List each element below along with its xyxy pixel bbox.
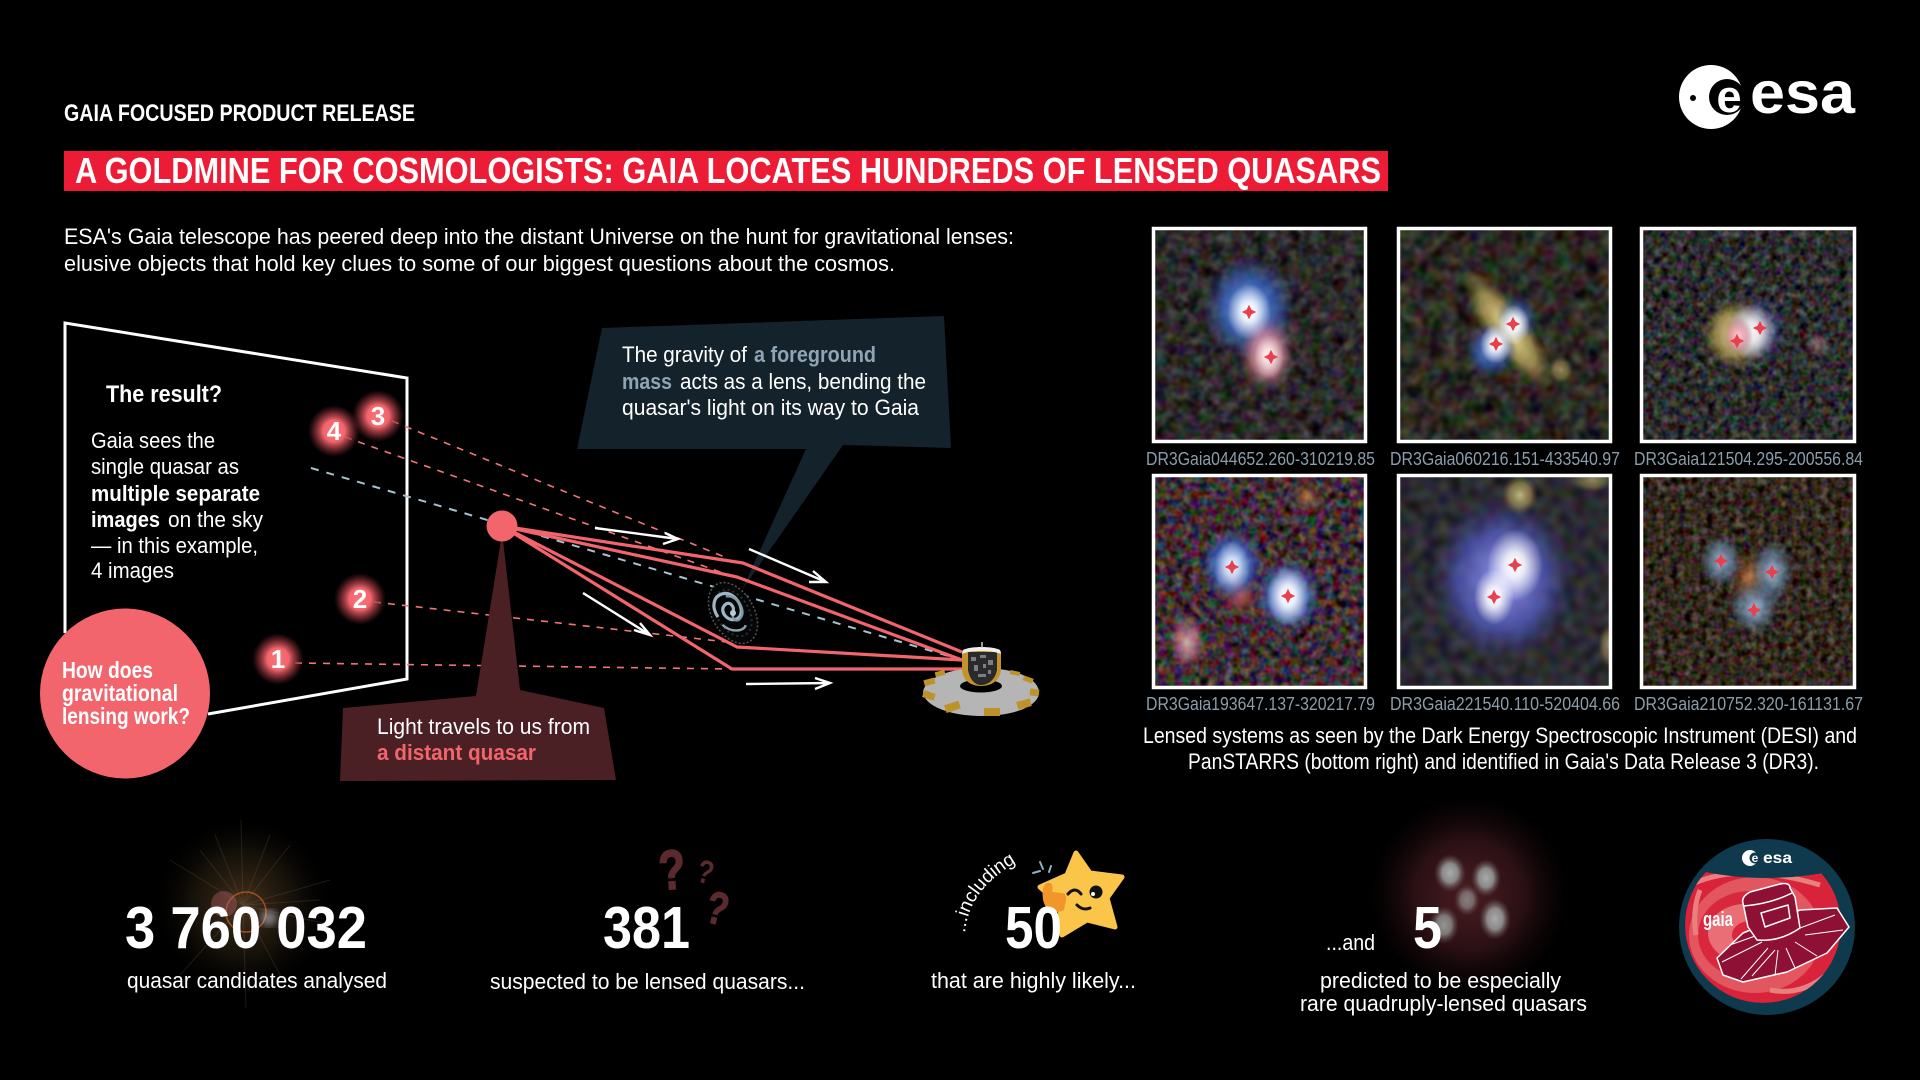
icon: question marks: ? <box>656 838 687 902</box>
lensing diagram <box>40 316 1039 781</box>
stat: highly likely: 50 <box>1005 895 1062 961</box>
icon: quasar flare <box>158 820 332 1008</box>
image point 3: 3 <box>371 401 385 431</box>
intro text: ESA's Gaia telescope has peered deep into the distant Universe on the hunt for gravitational lenses: <box>64 224 1014 249</box>
stat: suspected lensed quasars: suspected to be lensed quasars... <box>490 969 805 994</box>
stat: quadruply lensed quasars: rare quadruply-lensed quasars <box>1300 991 1587 1016</box>
icon: question marks <box>656 838 734 936</box>
image point 1: 1 <box>271 644 285 674</box>
icon: winking star <box>1033 853 1122 935</box>
Gaia mission badge <box>1679 839 1855 1015</box>
foreground mass callout <box>577 316 951 590</box>
image caption <box>1143 723 1857 774</box>
question circle: How does <box>62 657 153 683</box>
quasar callout: Light travels to us from <box>377 714 590 739</box>
icon: question marks: ? <box>701 881 734 936</box>
intro text <box>64 224 1014 276</box>
dashed line of sight <box>311 468 962 660</box>
sky image 4 <box>1152 474 1367 689</box>
sky image 2 <box>1397 227 1612 443</box>
question circle: lensing work? <box>62 703 190 729</box>
dashed apparent image lines <box>295 421 730 669</box>
stat: quasar candidates: quasar candidates analysed <box>127 968 387 993</box>
ESA logo: e <box>1716 71 1742 122</box>
question circle <box>40 608 210 778</box>
kicker heading: GAIA FOCUSED PRODUCT RELEASE <box>64 100 415 127</box>
label: including: ...including <box>955 854 1016 932</box>
galaxy lens <box>698 574 768 652</box>
quasar callout <box>340 540 616 781</box>
result text <box>91 428 263 583</box>
foreground mass callout: a foreground <box>754 342 876 367</box>
badge satellite <box>1717 884 1849 982</box>
result text: images <box>91 507 160 532</box>
ESA logo <box>1679 60 1856 129</box>
stat: quadruply lensed quasars: 5 <box>1413 895 1442 961</box>
sky plane frame <box>65 323 407 714</box>
image point 2 <box>334 573 386 625</box>
result text: multiple separate <box>91 481 260 506</box>
question circle: gravitational <box>62 680 178 706</box>
stat: quadruply lensed quasars: predicted to be especially <box>1320 968 1561 993</box>
stat: quadruply lensed quasars <box>1300 795 1587 1016</box>
result heading: The result? <box>106 381 222 408</box>
icon: question marks: ? <box>693 853 718 892</box>
Gaia mission badge: gaia <box>1703 909 1734 931</box>
icon: quadruple image glow <box>1369 795 1569 995</box>
direction arrows <box>583 528 830 689</box>
label image 4: DR3Gaia193647.137-320217.79 <box>1146 694 1375 714</box>
image point 2: 2 <box>353 584 367 614</box>
ESA logo: esa <box>1750 60 1856 126</box>
label image 1: DR3Gaia044652.260-310219.85 <box>1146 449 1375 469</box>
result text: single quasar as <box>91 454 239 479</box>
title banner: A GOLDMINE FOR COSMOLOGISTS: GAIA LOCATES HUNDREDS OF LENSED QUASARS <box>75 150 1381 191</box>
sky image 3 <box>1640 227 1856 443</box>
sky image 6 <box>1640 474 1856 689</box>
result text: on the sky <box>168 507 263 532</box>
foreground mass callout: quasar's light on its way to Gaia <box>622 395 920 420</box>
stat: suspected lensed quasars: 381 <box>603 895 690 961</box>
Gaia spacecraft <box>922 642 1039 716</box>
foreground mass callout: mass <box>622 369 672 394</box>
quasar callout: a distant quasar <box>377 740 536 765</box>
stat: highly likely <box>931 850 1136 993</box>
stat: quasar candidates <box>125 820 387 1008</box>
intro text: elusive objects that hold key clues to some of our biggest questions about the cosmos. <box>64 251 895 276</box>
stat: suspected lensed quasars <box>490 838 805 994</box>
image point 4: 4 <box>327 416 342 446</box>
label image 6: DR3Gaia210752.320-161131.67 <box>1634 694 1863 714</box>
badge ESA mark <box>1742 850 1792 867</box>
stat: quadruply lensed quasars: ...and <box>1326 930 1375 955</box>
label image 5: DR3Gaia221540.110-520404.66 <box>1390 694 1620 714</box>
image point 3 <box>352 390 404 442</box>
badge ESA mark: esa <box>1763 850 1792 867</box>
badge ESA mark: e <box>1752 851 1759 865</box>
result text: 4 images <box>91 558 174 583</box>
label image 3: DR3Gaia121504.295-200556.84 <box>1634 449 1863 469</box>
result text: — in this example, <box>91 533 258 558</box>
image caption: PanSTARRS (bottom right) and identified in Gaia's Data Release 3 (DR3). <box>1188 749 1819 774</box>
image point 1 <box>252 633 304 685</box>
quasar <box>486 510 518 542</box>
foreground mass callout: acts as a lens, bending the <box>680 369 926 394</box>
stat: quasar candidates: 3 760 032 <box>125 895 367 961</box>
label image 2: DR3Gaia060216.151-433540.97 <box>1390 449 1620 469</box>
image point 4 <box>308 405 360 457</box>
sky image 1 <box>1152 227 1367 443</box>
result text: Gaia sees the <box>91 428 215 453</box>
foreground mass callout: The gravity of <box>622 342 748 367</box>
bent light rays <box>502 526 962 669</box>
stat: highly likely: that are highly likely... <box>931 968 1136 993</box>
sky image 5 <box>1397 468 1622 689</box>
